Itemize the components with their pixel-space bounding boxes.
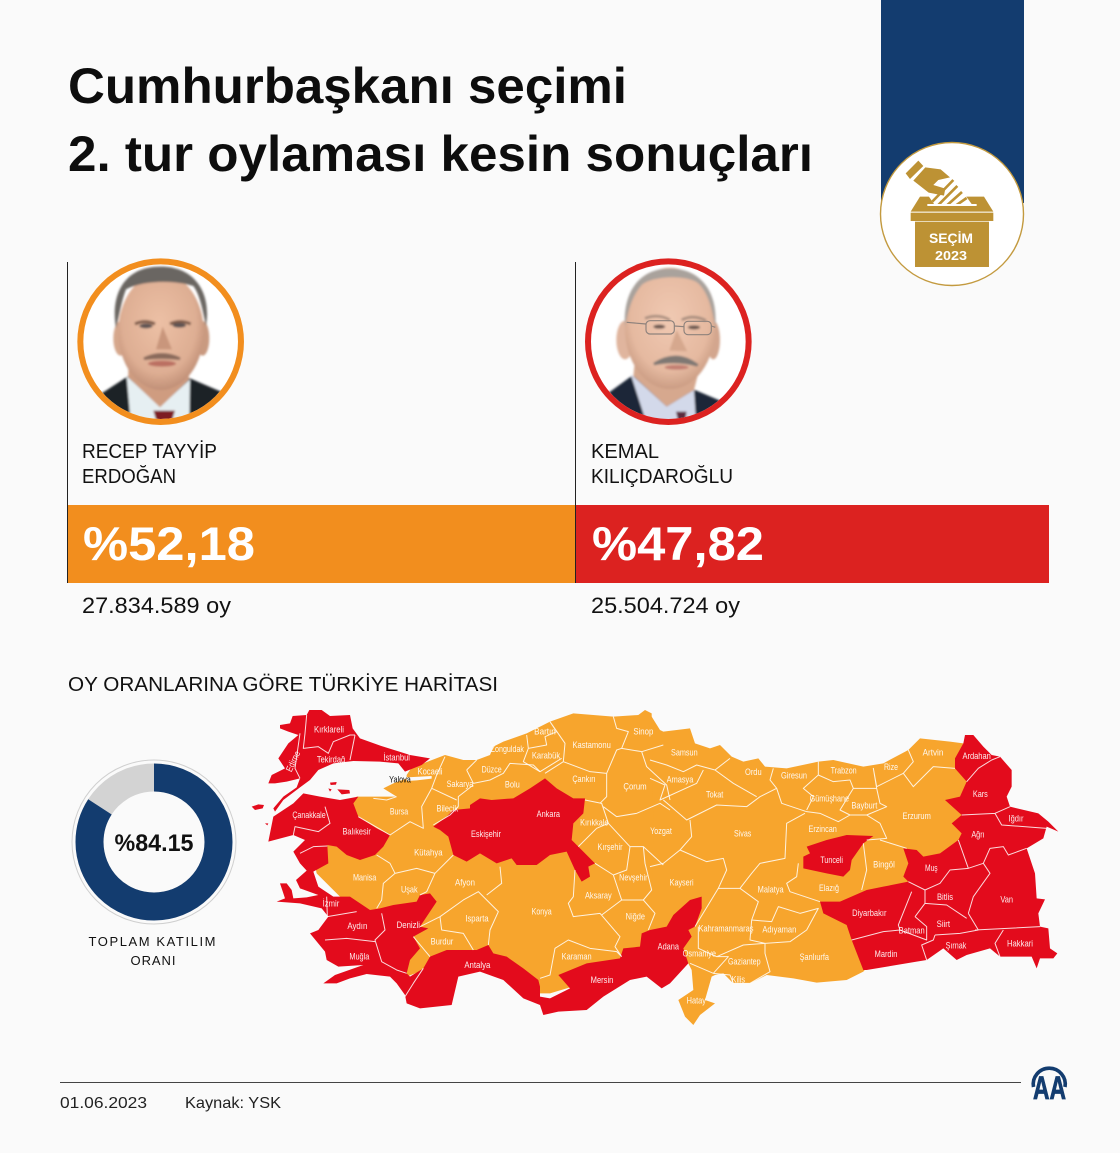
panel: Erdoğan xyxy=(67,261,575,618)
map: eastern provinces: Adana xyxy=(658,941,680,951)
map: eastern provinces: Ordu xyxy=(745,767,762,777)
map: western provinces: Çorum xyxy=(623,782,647,792)
map: western provinces: Uşak xyxy=(401,884,418,894)
candidate name: KILIÇDAROĞLU xyxy=(591,465,733,488)
map: eastern provinces: Rize xyxy=(884,762,898,772)
map: western provinces: Afyon xyxy=(455,877,475,887)
map: eastern provinces: Erzincan xyxy=(808,824,837,834)
map: western provinces: Bartın xyxy=(534,726,556,736)
map: eastern provinces: Şırnak xyxy=(946,940,967,950)
map: eastern provinces: Iğdır xyxy=(1008,813,1023,823)
map: western provinces: Denizli xyxy=(397,920,420,930)
map: eastern provinces: Gaziantep xyxy=(728,957,761,967)
map: western provinces: Balıkesir xyxy=(342,827,371,837)
map: eastern land base xyxy=(647,713,983,1025)
map: eastern provinces: Muş xyxy=(925,863,938,873)
gulf of Izmit xyxy=(407,776,432,781)
footer date: 01.06.2023 xyxy=(60,1095,147,1112)
map: western provinces: Bolu xyxy=(505,780,520,790)
map: western provinces: Çankırı xyxy=(572,774,596,784)
badge: Seçim 2023 ballot box: 2023 xyxy=(935,248,967,263)
map: eastern provinces xyxy=(650,735,1058,1006)
candidate name: ERDOĞAN xyxy=(82,465,176,488)
footer source: Kaynak: YSK xyxy=(185,1095,281,1112)
map: western provinces: Niğde xyxy=(626,912,645,922)
map: eastern provinces: Hatay xyxy=(687,996,706,1006)
map of Turkey xyxy=(252,710,1058,1025)
map: eastern provinces: Mardin xyxy=(875,949,897,959)
map: eastern provinces: Ağrı xyxy=(971,830,985,840)
badge: Seçim 2023 ballot box: SEÇİM xyxy=(929,230,973,246)
map: eastern provinces: Osmaniye xyxy=(683,948,716,958)
title: Cumhurbaşkanı seçimi xyxy=(68,58,627,114)
turnout caption: TOPLAM KATILIM xyxy=(88,934,216,949)
map: eastern provinces: Bingöl xyxy=(873,859,895,869)
map: western provinces: Sinop xyxy=(633,726,653,736)
map: western provinces: Edirne xyxy=(284,749,302,773)
turnout caption xyxy=(88,934,216,968)
map: eastern provinces: Batman xyxy=(899,926,925,936)
result bar: %52,18 xyxy=(83,517,255,570)
map: eastern provinces: Giresun xyxy=(781,770,807,780)
map: western provinces: Kırşehir xyxy=(597,842,622,852)
map: western provinces: Antalya xyxy=(464,960,491,970)
map: eastern provinces: Kars xyxy=(973,789,988,799)
map: western provinces: Zonguldak xyxy=(491,744,524,754)
map: western provinces: Kocaeli xyxy=(417,767,442,777)
map: eastern provinces: Artvin xyxy=(923,747,943,757)
map: western provinces: Muğla xyxy=(349,951,370,961)
map: western provinces: İzmir xyxy=(323,898,339,908)
map: eastern provinces: Ardahan xyxy=(962,751,991,761)
turnout caption: ORANI xyxy=(130,953,176,968)
map: eastern provinces: Gümüşhane xyxy=(810,793,849,803)
map: western provinces: Isparta xyxy=(465,913,489,923)
title xyxy=(68,58,813,182)
map: western provinces: Düzce xyxy=(482,764,502,774)
red: eastern and south-eastern provinces xyxy=(820,735,1058,970)
map: eastern provinces: Sivas xyxy=(734,828,752,838)
title: 2. tur oylaması kesin sonuçları xyxy=(68,126,813,182)
map: eastern provinces: Tokat xyxy=(706,790,724,800)
map: western provinces: Nevşehir xyxy=(619,873,647,883)
map: western provinces: Tekirdağ xyxy=(317,754,345,764)
red: Thrace and Istanbul xyxy=(268,710,430,812)
result bar: %47,82 xyxy=(592,517,764,570)
map: western provinces: Bursa xyxy=(390,807,409,817)
map: western provinces: Ankara xyxy=(537,809,561,819)
map: eastern provinces: Yozgat xyxy=(650,826,672,836)
map: eastern provinces: Trabzon xyxy=(831,765,857,775)
red: Aegean and Mediterranean provinces xyxy=(268,793,702,1015)
vote count: 25.504.724 oy xyxy=(591,593,740,618)
map: western provinces: Aksaray xyxy=(585,891,612,901)
panel: Kılıçdaroğlu xyxy=(575,261,1049,618)
islands xyxy=(252,782,350,825)
logo: AA xyxy=(1033,1068,1066,1106)
navy ribbon xyxy=(881,0,1024,203)
map: eastern provinces: Adıyaman xyxy=(762,925,796,935)
turnout donut chart xyxy=(72,760,236,924)
map: eastern provinces: Tunceli xyxy=(820,855,843,865)
turnout donut chart: %84.15 xyxy=(114,830,194,857)
map: western provinces xyxy=(252,710,702,1015)
badge: Seçim 2023 ballot box xyxy=(880,142,1024,286)
red: Tunceli xyxy=(803,835,873,877)
map: eastern provinces: Diyarbakır xyxy=(852,908,886,918)
map: eastern provinces: Siirt xyxy=(937,919,950,929)
map: eastern provinces: Kahramanmaraş xyxy=(698,923,754,933)
candidate name xyxy=(82,440,217,488)
candidate name: RECEP TAYYİP xyxy=(82,440,217,463)
map: western provinces: Kırklareli xyxy=(314,724,344,734)
map: eastern provinces: Elazığ xyxy=(819,883,839,893)
map: eastern provinces: Van xyxy=(1000,895,1013,905)
portrait: Kılıçdaroğlu xyxy=(588,261,749,423)
map: eastern provinces: Bitlis xyxy=(937,892,953,902)
map: western provinces: Bilecik xyxy=(436,803,458,813)
result bar xyxy=(576,505,1049,583)
map: eastern provinces: Kilis xyxy=(732,974,745,984)
map: eastern provinces: Samsun xyxy=(671,748,698,758)
map: western provinces: Karabük xyxy=(532,751,560,761)
map: western provinces: Mersin xyxy=(591,975,613,985)
map: western provinces: Konya xyxy=(532,907,552,917)
map: western provinces: Sakarya xyxy=(447,779,474,789)
map: western provinces: Eskişehir xyxy=(471,829,501,839)
map heading: OY ORANLARINA GÖRE TÜRKİYE HARİTASI xyxy=(68,673,498,696)
portrait: Erdoğan xyxy=(80,261,241,423)
map: western provinces: Çanakkale xyxy=(292,810,326,820)
map: western provinces: Kırıkkale xyxy=(580,818,608,828)
map: western provinces: İstanbul xyxy=(383,752,410,762)
map: western provinces: Manisa xyxy=(353,872,377,882)
map: western provinces: Burdur xyxy=(431,937,453,947)
map: western provinces: Kütahya xyxy=(414,848,443,858)
vote count: 27.834.589 oy xyxy=(82,593,231,618)
map: western provinces: Yalova xyxy=(389,774,411,784)
footer rule xyxy=(60,1082,1021,1083)
candidate name: KEMAL xyxy=(591,441,659,463)
map: eastern provinces: Kayseri xyxy=(670,877,694,887)
map: eastern provinces: Malatya xyxy=(758,884,784,894)
map: eastern provinces: Hakkari xyxy=(1007,938,1033,948)
map: western provinces: Aydın xyxy=(347,921,367,931)
red: Ankara and Eskişehir xyxy=(433,778,595,882)
map: western provinces: Kastamonu xyxy=(572,740,611,750)
map: eastern provinces: Şanlıurfa xyxy=(800,952,830,962)
logo: AA: AA xyxy=(1033,1070,1066,1106)
map: eastern provinces: Bayburt xyxy=(851,800,878,810)
result bar xyxy=(68,505,575,583)
map: eastern provinces: Erzurum xyxy=(902,811,931,821)
map: eastern provinces: Amasya xyxy=(667,774,694,784)
map: western provinces: Karaman xyxy=(562,951,592,961)
candidate name xyxy=(591,441,733,488)
